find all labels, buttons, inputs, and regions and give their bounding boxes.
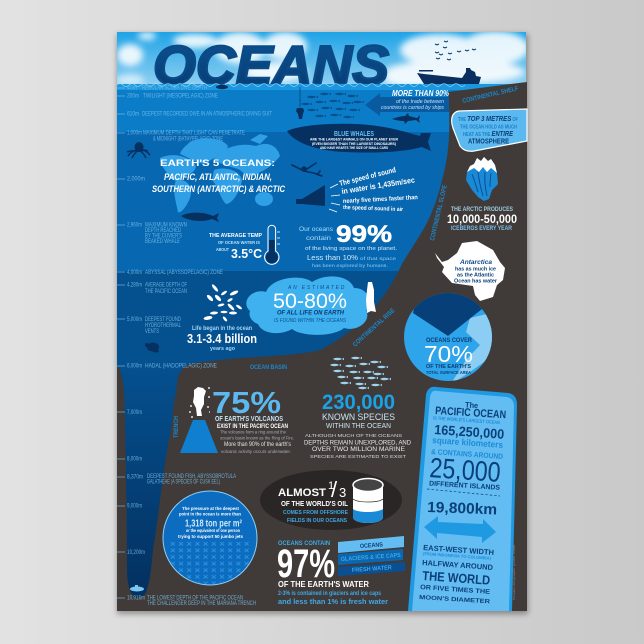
chart: oceans cover 70 percent: OCEANS COVER bbox=[426, 338, 473, 344]
callout: cloud with 50-80 percent: AN ESTIMATED bbox=[287, 285, 346, 291]
depth scale labels: 2,000m bbox=[127, 176, 145, 182]
icon: octopus bbox=[127, 142, 150, 158]
panel: blue whale: AND HAVE HEARTS THE SIZE OF SMALL CARS bbox=[320, 146, 388, 150]
world map bbox=[160, 134, 280, 212]
depth scale labels: & MIDNIGHT (BATHYPELAGIC) ZONE bbox=[153, 136, 223, 142]
callout: 90 percent of trade arrow: MORE THAN 90% bbox=[392, 89, 449, 98]
callout: 97 percent of water: OF THE EARTH'S WATER bbox=[278, 580, 369, 589]
depth scale labels: DEEPEST FOUND FISH, ABYSSOBROTULA bbox=[147, 474, 236, 480]
callout: 75 percent volcanoes: The volcanos form a ring around the bbox=[220, 430, 286, 434]
icon: turtle bbox=[145, 342, 159, 352]
callout: 230,000 species: OVER TWO MILLION MARINE bbox=[312, 446, 406, 453]
depth scale labels: THE LOWEST DEPTH OF THE PACIFIC OCEAN bbox=[147, 596, 243, 602]
depth scale labels: 4,280m bbox=[127, 282, 142, 288]
depth scale labels: 2,960m bbox=[127, 222, 142, 228]
callout: Antarctica: has as much ice bbox=[455, 266, 496, 272]
panel: Pacific Ocean facts: MOON'S DIAMETER bbox=[419, 595, 491, 605]
callout: 97 percent of water: 2-3% is contained in glaciers and ice caps bbox=[278, 591, 382, 597]
callout: 230,000 species: KNOWN SPECIES bbox=[322, 412, 395, 423]
callout: 97 percent of water bbox=[277, 536, 405, 606]
callout: Antarctica: Antarctica bbox=[459, 259, 492, 266]
callout: top 3 metres: THE TOP 3 METRES OF bbox=[458, 114, 518, 123]
labels: ocean floor zones bbox=[174, 85, 519, 438]
callout: life began bbox=[187, 284, 257, 352]
panel: Pacific Ocean facts: (FROM INDONESIA TO COLOMBIA) bbox=[423, 551, 492, 561]
panel: blue whale: (EVEN BIGGER THAN THE LARGEST DINOSAURS) bbox=[312, 142, 397, 146]
callout: top 3 metres bbox=[452, 109, 527, 151]
callout: Antarctica: as the Atlantic bbox=[457, 272, 494, 278]
depth scale labels: GALATHEAE (A SPECIES OF CUSK EEL) bbox=[147, 480, 220, 486]
icon: birds bbox=[435, 41, 476, 60]
callout: 99 percent: Our oceans bbox=[299, 226, 334, 233]
callout: average temperature bbox=[209, 225, 280, 264]
callout: life began: 3.1-3.4 billion bbox=[187, 331, 257, 346]
callout: speed of sound: The speed of sound bbox=[338, 165, 397, 188]
panel: blue whale: BLUE WHALES bbox=[334, 131, 374, 138]
callout: pressure at the deepest point: or the equivalent of one person bbox=[186, 528, 240, 533]
callout: almost one third of oil: COMES FROM OFFSHORE bbox=[283, 510, 348, 516]
depth scale labels: 5,000m bbox=[127, 317, 142, 323]
depth scale labels: 10,916m bbox=[127, 596, 145, 602]
callout: cloud with 50-80 percent: OF ALL LIFE ON EARTH bbox=[277, 310, 344, 316]
depth scale labels: 6,000m bbox=[127, 364, 142, 370]
callout: pressure at the deepest point: point in the ocean is more than bbox=[179, 512, 241, 516]
labels: ocean floor zones: CONTINENTAL SLOPE bbox=[429, 184, 449, 241]
depth scale labels: 8,000m bbox=[127, 456, 142, 462]
callout: 99 percent: of the living space on the planet. bbox=[305, 246, 397, 252]
callout: top 3 metres: HEAT AS THE ENTIRE bbox=[463, 131, 513, 138]
heading: Earth's 5 oceans: EARTH'S 5 OCEANS: bbox=[160, 158, 275, 168]
panel: Pacific Ocean facts bbox=[408, 387, 517, 611]
icon: bacteria bbox=[203, 284, 243, 322]
callout: 97 percent of water: and less than 1% is fresh water bbox=[278, 597, 388, 606]
panel: blue whale: ARE THE LARGEST ANIMALS ON OUR PLANET EVER bbox=[310, 138, 398, 142]
heading: Earth's 5 oceans: SOUTHERN (ANTARCTIC) & ARCTIC bbox=[152, 184, 285, 195]
panel: Pacific Ocean facts: EAST-WEST WIDTH bbox=[423, 543, 494, 557]
panel: sea floor bbox=[117, 82, 527, 611]
callout: arctic icebergs: 10,000-50,000 bbox=[447, 212, 517, 226]
callout: 99 percent: 99% bbox=[336, 221, 392, 248]
panel: Pacific Ocean facts: PACIFIC OCEAN bbox=[435, 405, 506, 421]
depth scale labels: MAXIMUM KNOWN bbox=[145, 222, 187, 228]
labels: ocean floor zones: OCEAN BASIN bbox=[250, 364, 287, 371]
chart: oceans cover 70 percent bbox=[404, 293, 492, 381]
callout: average temperature: THE AVERAGE TEMP bbox=[209, 233, 262, 239]
panel: Pacific Ocean facts: DIFFERENT ISLANDS bbox=[429, 481, 500, 492]
panel: Pacific Ocean facts: HALFWAY AROUND bbox=[422, 558, 494, 572]
depth scale labels: BEAKED WHALE bbox=[145, 239, 180, 245]
callout: 90 percent of trade arrow: countries is carried by ships bbox=[381, 105, 444, 111]
depth scale labels: THE PACIFIC OCEAN bbox=[145, 289, 187, 295]
chart: oceans cover 70 percent: TOTAL SURFACE AREA bbox=[426, 370, 472, 375]
callout: pressure at the deepest point bbox=[163, 491, 257, 586]
icon: fish school bbox=[301, 93, 364, 118]
callout: 90 percent of trade arrow bbox=[365, 89, 449, 116]
depth scale labels: 1,000m MAXIMUM DEPTH THAT LIGHT CAN PENETRATE bbox=[127, 130, 245, 136]
icon: cargo ship bbox=[417, 68, 481, 84]
icon: submarine near surface bbox=[216, 84, 228, 89]
depth scale labels: ABYSSAL (ABYSSOPELAGIC) ZONE bbox=[145, 270, 223, 276]
panel: Pacific Ocean facts: THE WORLD bbox=[422, 568, 491, 588]
chart: water share bars: FRESH WATER bbox=[352, 565, 393, 574]
depth scale labels: 200m bbox=[127, 94, 139, 100]
callout: almost one third of oil: FIELDS IN OUR OCEANS bbox=[287, 518, 347, 524]
panel: Pacific Ocean facts: 19,800km bbox=[427, 499, 497, 518]
panel: Pacific Ocean facts: 25,000 bbox=[429, 452, 502, 488]
icon: scuba diver bbox=[292, 163, 322, 176]
panel: Pacific Ocean facts: The bbox=[465, 401, 479, 410]
callout: 99 percent: contain bbox=[306, 235, 331, 242]
depth scale labels: DEEPEST RECORDED DIVE IN AN ATMOSPHERIC DIVING SUIT bbox=[142, 112, 272, 118]
depth scale labels: HADAL (HADOPELAGIC) ZONE bbox=[145, 364, 217, 370]
callout: Antarctica bbox=[435, 241, 505, 301]
callout: pressure at the deepest point: trying to support 50 jumbo jets bbox=[178, 534, 243, 540]
icon: deep-sea submersible bbox=[130, 585, 144, 592]
callout: 75 percent volcanoes bbox=[180, 385, 294, 454]
callout: 230,000 species: 230,000 bbox=[322, 391, 395, 414]
callout: 75 percent volcanoes: EXIST IN THE PACIFIC OCEAN bbox=[217, 424, 288, 430]
callout: 99 percent: Less than 10% bbox=[307, 253, 358, 262]
icon: thermometer bbox=[265, 225, 280, 264]
depth scale labels: 40m bbox=[127, 86, 137, 92]
callout: average temperature: ABOUT bbox=[216, 247, 229, 252]
callout: 75 percent volcanoes: ocean's basin known as the Ring of Fire. bbox=[220, 436, 294, 440]
callout: 75 percent volcanoes: 75% bbox=[212, 385, 281, 420]
callout: 99 percent bbox=[299, 221, 397, 269]
labels: ocean floor zones: TRENCH bbox=[174, 416, 180, 438]
depth scale labels: TWILIGHT (MESOPELAGIC) ZONE bbox=[143, 94, 218, 100]
callout: speed of sound: nearly five times faster than bbox=[343, 194, 418, 205]
labels: ocean floor zones: CONTINENTAL RISE bbox=[352, 307, 397, 348]
panel: water layers bbox=[117, 84, 526, 600]
depth scale labels: DEPTH REACHED bbox=[145, 228, 181, 234]
callout: 99 percent: has been explored by humans. bbox=[312, 263, 388, 269]
callout: top 3 metres: THE OCEAN HOLD AS MUCH bbox=[460, 124, 517, 130]
depth scale labels: THE CHALLENGER DEEP IN THE MARIANA TRENCH bbox=[147, 601, 256, 607]
depth scale labels: HYDROTHERMAL bbox=[145, 323, 181, 329]
callout: 230,000 species: SPECIES ARE ESTIMATED TO EXIST bbox=[310, 454, 406, 460]
panel: Pacific Ocean facts: IS THE WORLD'S LARGEST OCEAN bbox=[433, 416, 501, 426]
depth scale labels: 7,000m bbox=[127, 410, 142, 416]
labels: ocean floor zones: CONTINENTAL SHELF bbox=[462, 85, 519, 105]
callout: almost one third of oil: OF THE WORLD'S OIL bbox=[281, 501, 349, 508]
panel: blue whale bbox=[287, 124, 431, 152]
depth scale labels: REGULAR SCUBA DIVE DEPTH bbox=[142, 86, 207, 92]
heading: Earth's 5 oceans: PACIFIC, ATLANTIC, INDIAN, bbox=[164, 172, 272, 183]
icon: atmospheric diving suit bbox=[296, 87, 304, 119]
depth scale labels: 10,200m bbox=[127, 550, 145, 556]
depth scale labels: 8,370m bbox=[127, 474, 143, 480]
credit text: Oceans infographic poster credit bbox=[512, 545, 516, 600]
callout: 97 percent of water: 97% bbox=[277, 542, 335, 586]
icon: oil barrel bbox=[353, 478, 383, 523]
callout: speed of sound bbox=[296, 165, 418, 213]
depth scale labels: AVERAGE DEPTH OF bbox=[145, 282, 187, 288]
panel: sky with clouds bbox=[116, 31, 529, 87]
callout: average temperature: OF OCEAN WATER IS bbox=[218, 240, 260, 245]
callout: almost one third of oil: 1 bbox=[328, 480, 334, 492]
callout: 230,000 species: DEPTHS REMAIN UNEXPLORED, AND bbox=[304, 440, 412, 446]
title: OCEANS bbox=[153, 34, 389, 96]
depth scale labels: 9,000m bbox=[127, 504, 142, 510]
icon: shark bbox=[392, 113, 420, 124]
panel: Pacific Ocean facts: OR FIVE TIMES THE bbox=[420, 584, 491, 596]
chart: oceans cover 70 percent: OF THE EARTH'S bbox=[426, 364, 471, 370]
callout: 230,000 species bbox=[304, 391, 412, 460]
callout: life began: Life began in the ocean bbox=[192, 326, 252, 332]
icon: width arrow bbox=[424, 516, 496, 543]
callout: 97 percent of water: OCEANS CONTAIN bbox=[278, 540, 330, 547]
callout: arctic icebergs: THE ARCTIC PRODUCES bbox=[451, 207, 513, 213]
panel: Pacific Ocean facts: square kilometers bbox=[432, 435, 503, 450]
callout: cloud with 50-80 percent: 50-80% bbox=[273, 290, 347, 313]
icon: volcano bbox=[180, 387, 218, 453]
callout: life began: years ago bbox=[210, 346, 236, 352]
callout: average temperature: 3.5°C bbox=[231, 246, 263, 261]
callout: Antarctica: Ocean has water bbox=[454, 278, 498, 284]
callout: cloud with 50-80 percent bbox=[246, 276, 370, 335]
depth scale labels bbox=[117, 86, 272, 607]
callout: pressure at the deepest point: The pressure at the deepest bbox=[182, 506, 239, 511]
depth scale labels: 4,000m bbox=[127, 270, 142, 276]
callout: 75 percent volcanoes: More than 90% of the earth's bbox=[224, 442, 291, 448]
depth scale labels: VENTS bbox=[145, 329, 159, 335]
callout: almost one third of oil: 3 bbox=[339, 485, 346, 500]
callout: almost one third of oil: ALMOST bbox=[278, 487, 326, 499]
callout: 230,000 species: ALTHOUGH MUCH OF THE OCEANS bbox=[305, 433, 402, 438]
callout: top 3 metres: ATMOSPHERE bbox=[468, 138, 509, 146]
callout: almost one third of oil: / bbox=[331, 477, 338, 502]
callout: arctic icebergs bbox=[447, 207, 517, 232]
icon: iceberg bbox=[466, 157, 498, 201]
icon: light fish school bbox=[330, 357, 391, 389]
icon: beaked whale bbox=[181, 213, 219, 222]
icon: hydrothermal vent bbox=[366, 282, 376, 313]
chart: water share bars: OCEANS bbox=[360, 542, 383, 550]
callout: pressure at the deepest point: 1,318 ton per m² bbox=[185, 518, 242, 530]
callout: arctic icebergs: ICEBERGS EVERY YEAR bbox=[451, 226, 513, 232]
depth scale labels: 610m bbox=[127, 112, 139, 118]
callout: 99 percent: of that space bbox=[360, 256, 396, 262]
chart: water share bars bbox=[338, 536, 405, 576]
callout: cloud with 50-80 percent: IS FOUND WITHIN THE OCEANS bbox=[274, 318, 347, 324]
heading: Earth's 5 oceans bbox=[152, 158, 285, 195]
callout: speed of sound: the speed of sound in air bbox=[343, 205, 404, 213]
callout: 90 percent of trade arrow: of the trade between bbox=[396, 99, 444, 105]
callout: 75 percent volcanoes: OF EARTH'S VOLCANOS bbox=[215, 416, 283, 423]
depth scale labels: DEEPEST FOUND bbox=[145, 317, 181, 323]
chart: water share bars: GLACIERS & ICE CAPS bbox=[341, 553, 401, 563]
callout: speed of sound: in water is 1,435m/sec bbox=[341, 175, 416, 196]
callout: 230,000 species: WITHIN THE OCEAN bbox=[326, 423, 391, 430]
panel: Pacific Ocean facts: 165,250,000 bbox=[434, 422, 505, 442]
depth scale labels: BY THE CUVIER'S bbox=[145, 234, 182, 240]
callout: 75 percent volcanoes: volcanic activity occurs underwater. bbox=[221, 449, 291, 454]
chart: oceans cover 70 percent: 70% bbox=[424, 341, 473, 367]
panel: Pacific Ocean facts: & CONTAINS AROUND bbox=[431, 447, 504, 461]
callout: almost one third of oil bbox=[260, 470, 402, 530]
